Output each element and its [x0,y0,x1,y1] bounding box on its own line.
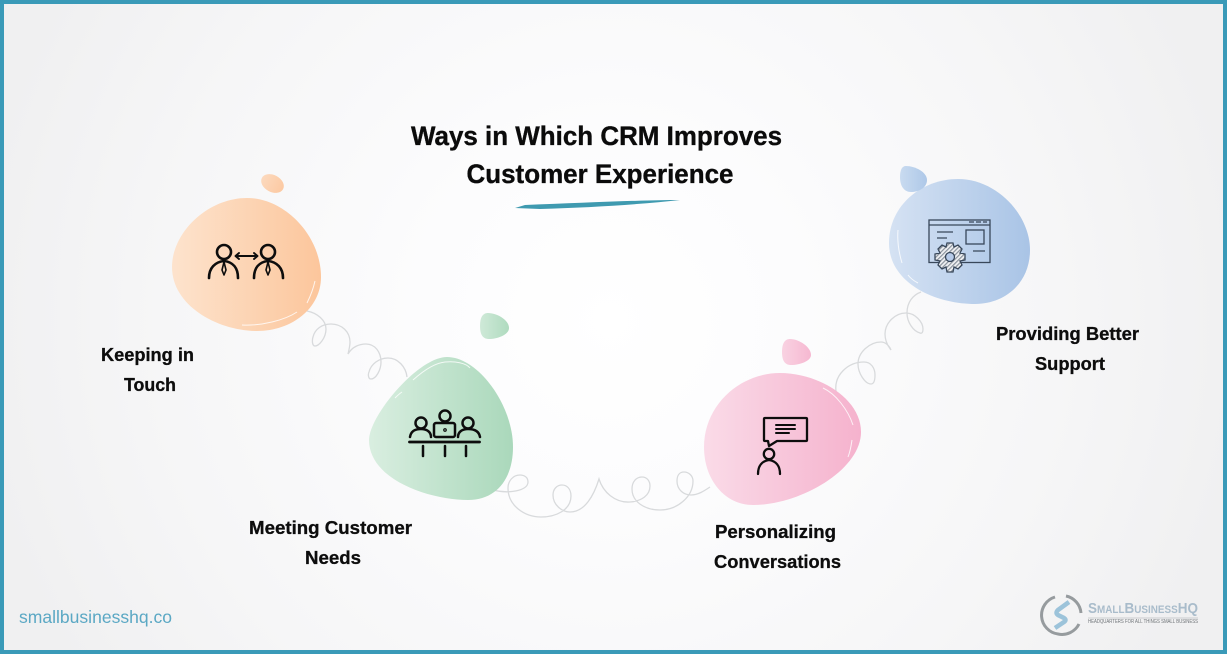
logo ring [1042,596,1081,634]
icon: two people with arrow [209,245,283,278]
panel: personalizing conversations [704,339,861,572]
icon: gear [935,243,965,272]
panel: meeting customer needs [249,313,513,568]
label: keeping in touch: Touch [124,374,176,395]
label: keeping in touch: Keeping in [101,344,194,365]
label: personalizing conversations: Conversations [714,551,841,572]
blob highlight [242,281,315,325]
label: providing better support: Providing Better [996,323,1139,344]
small blue blob [900,166,927,192]
label: meeting customer needs [249,517,412,568]
small pink blob [782,339,811,365]
label: providing better support: Support [1035,353,1105,374]
blob highlight [823,388,853,457]
blob highlight [898,230,918,283]
icon: browser window with gear [929,220,990,272]
title: Ways in Which CRM Improves [411,121,782,151]
connector: green to pink [493,472,710,517]
logo tagline: HEADQUARTERS FOR ALL THINGS SMALL BUSINESS [1088,619,1199,625]
blob highlight [395,362,470,398]
title: Customer Experience [466,159,734,189]
green blob [369,357,513,500]
title underline [515,200,680,209]
label: providing better support [996,323,1139,374]
label: keeping in touch [101,344,194,395]
connector: pink to blue [836,292,923,391]
label: personalizing conversations: Personalizing [715,521,836,542]
label: meeting customer needs: Needs [305,547,361,568]
orange blob [172,198,321,331]
blue blob [889,179,1030,304]
panel: keeping in touch [101,170,321,395]
logo [1042,596,1199,634]
small green blob [480,313,509,339]
pink blob [704,373,861,505]
small orange blob [258,170,287,197]
connector: orange to green [307,311,407,379]
logo mark [1055,602,1069,628]
icon: person with speech bubble [758,418,807,474]
website url: smallbusinesshq.co [19,607,172,627]
logo tagline rule [1088,617,1198,619]
icon: meeting table with laptop [410,410,480,456]
label: meeting customer needs: Meeting Customer [249,517,412,538]
label: personalizing conversations [714,521,841,572]
title [411,121,782,189]
panel: providing better support [889,166,1139,374]
logo name: SMALLBUSINESSHQ [1088,600,1198,617]
